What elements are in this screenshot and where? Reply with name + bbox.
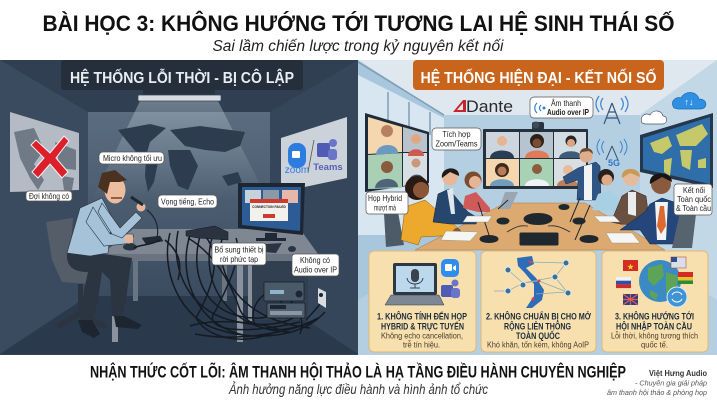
card: global integration: quốc tế.: [641, 340, 668, 350]
microphone: [131, 197, 163, 244]
icon: signal tower: [596, 96, 628, 124]
label: no audio over ip: Audio over IP: [294, 266, 337, 274]
desk cabinet: [250, 258, 308, 320]
participant: woman in blue: [592, 169, 620, 212]
label: zoom teams integration: Zoom/Teams: [436, 140, 478, 148]
label: no audio over ip: [292, 254, 339, 276]
label: mic not optimal: Micro không tối ưu: [103, 154, 162, 163]
right wall poster zoom teams: zoom: [285, 165, 309, 176]
brand note: - Chuyên gia giải pháp: [635, 378, 707, 388]
card: global integration: Lỗi thời, không tương thích: [611, 332, 698, 340]
banner heading: HỆ THỐNG HIỆN ĐẠI - KẾT NỐI SỐ: [420, 69, 656, 87]
panel: modern system: [358, 60, 717, 355]
icon: white cloud: [641, 111, 667, 124]
table: [415, 203, 665, 250]
title: BÀI HỌC 3: KHÔNG HƯỚNG TỚI TƯƠNG LAI HỆ SINH THÁI SỐ: [42, 10, 674, 36]
label: no hybrid connection: Đợi không có: [29, 192, 69, 201]
icon: 5G signal: [597, 139, 627, 168]
label: hybrid meetings: Họp Hybrid: [368, 194, 402, 203]
label: extra devices: [212, 243, 266, 265]
icon: vietnam network map: [494, 256, 571, 308]
participant: man in navy suit: [433, 168, 478, 224]
participant: woman in red: [463, 172, 490, 212]
brand note: [607, 369, 707, 397]
banner heading: [413, 60, 664, 90]
camera: [532, 122, 544, 129]
participant: woman in yellow: [384, 176, 461, 247]
label: echo: [158, 195, 217, 208]
desk: [102, 229, 318, 342]
label: hybrid meetings: [366, 192, 408, 214]
mouse under hand: [123, 244, 137, 250]
card: hybrid and online: 1. KHÔNG TÍNH ĐẾN HỌP: [377, 310, 467, 322]
label: no audio over ip: Không có: [300, 256, 330, 265]
right wall poster zoom teams: Teams: [313, 162, 343, 173]
participant: man with orange tie: [620, 173, 688, 244]
card: global integration: HỘI NHẬP TOÀN CẦU: [616, 320, 692, 332]
subtitle: Sai lầm chiến lược trong kỷ nguyên kết nối: [212, 38, 504, 55]
icon: blue cloud: ↑↓: [684, 97, 694, 107]
ceiling lamp: [138, 90, 221, 101]
keyboard and mouse: [266, 243, 296, 253]
papers on table: [441, 216, 640, 243]
brand note: âm thanh hội thảo & phòng họp: [607, 388, 707, 397]
left wall poster with red cross: [10, 112, 79, 192]
banner heading: [61, 60, 303, 90]
label: zoom teams integration: Tích hợp: [442, 130, 471, 139]
world map on back wall: [118, 124, 245, 192]
card: national expansion: RỘNG LIÊN THÔNG: [504, 320, 571, 332]
windows: [358, 62, 444, 235]
card: national expansion: 2. KHÔNG CHUẨN BỊ CHO MỞ: [486, 310, 591, 322]
icon: globe with flags: ★: [627, 263, 634, 271]
audio over ip label: Âm thanh: [551, 98, 581, 108]
audio over ip label: Audio over IP: [547, 108, 589, 117]
monitor: [238, 183, 305, 241]
card: national expansion: [481, 251, 596, 352]
label: hybrid meetings: mượt mà: [374, 204, 396, 212]
label: national global connection: [674, 184, 712, 215]
card: hybrid and online: Không echo cancellation,: [381, 332, 463, 340]
label: extra devices: Bổ sung thiết bị: [214, 244, 264, 254]
wall socket: [318, 288, 326, 308]
card: national expansion: TOÀN QUỐC: [516, 330, 560, 341]
right wall poster zoom teams: [281, 117, 347, 192]
card: national expansion: Khó khăn, tốn kém, không AoIP: [487, 340, 589, 350]
label: national global connection: Kết nối: [683, 186, 705, 195]
icon: teams tile: [441, 280, 460, 298]
back desk legs: [133, 261, 227, 301]
chairs at right: [672, 212, 696, 248]
chair: [46, 218, 108, 329]
banner heading: HỆ THỐNG LỖI THỜI - BỊ CÔ LẬP: [70, 69, 294, 87]
laptop: [499, 192, 518, 209]
label: extra devices: rời phức tạp: [220, 255, 258, 264]
label: national global connection: Toàn quốc: [677, 195, 711, 204]
main video screen: [483, 129, 588, 189]
tangled cables: [134, 231, 325, 339]
label: mic not optimal: [99, 152, 164, 164]
network switch box: [186, 226, 228, 240]
audio over ip label: [530, 97, 593, 118]
brand note: Việt Hưng Audio: [649, 369, 707, 378]
dante logo: Dante: [466, 97, 513, 116]
card: hybrid and online: trễ tín hiệu.: [403, 340, 440, 350]
core insight subtitle: Ảnh hưởng năng lực điều hành và hình ảnh tổ chức: [228, 382, 488, 397]
dante logo: [453, 100, 512, 112]
icon: blue cloud: [673, 92, 706, 109]
card: global integration: 3. KHÔNG HƯỚNG TỚI: [615, 310, 694, 322]
man with microphone: [67, 170, 146, 338]
icon: laptop with microphone: [385, 263, 444, 305]
card: hybrid and online: HYBRID & TRỰC TUYẾN: [381, 322, 464, 332]
label: national global connection: & Toàn cầu: [676, 204, 711, 213]
connection failed dialog: CONNECTION FAILED: [252, 205, 287, 209]
icon: 5G signal: 5G: [608, 158, 620, 168]
participant: man in brown jacket: [611, 169, 650, 226]
label: zoom teams integration: [432, 128, 481, 150]
card: global integration: [602, 251, 708, 352]
left video screen: [365, 113, 429, 192]
microphones and conference speaker: [478, 198, 598, 245]
label: echo: Vọng tiếng, Echo: [161, 198, 214, 206]
panel: outdated system: [0, 60, 358, 355]
right world map screen: [640, 113, 713, 188]
icon: zoom tile: [441, 259, 459, 277]
audio equipment rack: [264, 282, 305, 318]
presenter: [563, 148, 601, 200]
card: hybrid and online: [369, 251, 476, 352]
